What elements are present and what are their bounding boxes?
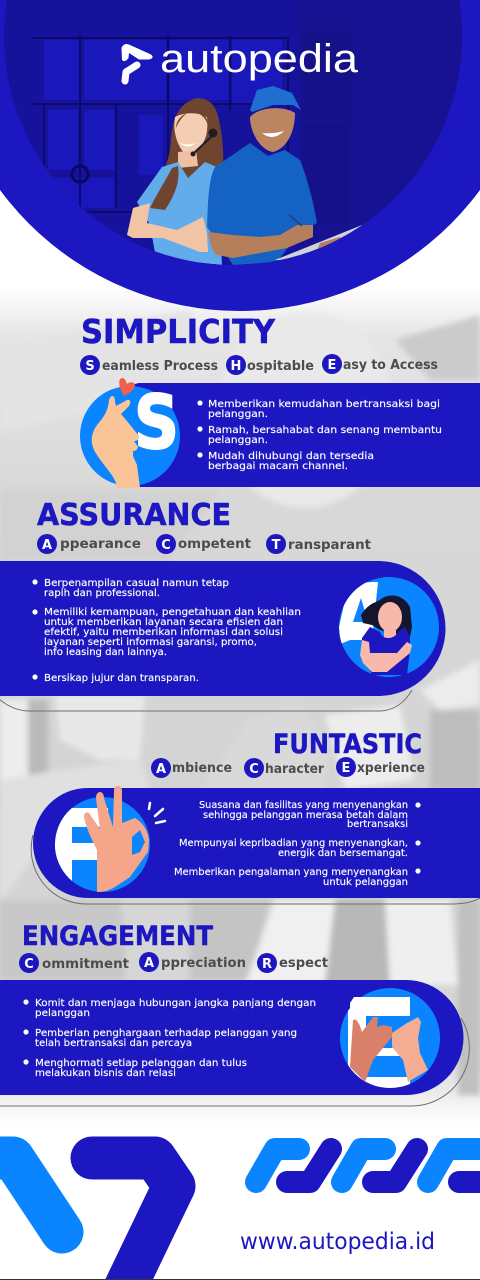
keywords row: ompetent [178, 536, 252, 552]
keywords row: haracter [265, 761, 324, 777]
heading: ENGAGEMENT [22, 921, 214, 952]
keywords row: A [42, 538, 52, 553]
bullet list: pelanggan. [208, 409, 268, 420]
logo icon [122, 44, 153, 81]
bullet list: energik dan bersemangat. [278, 848, 408, 859]
bullet list: Berpenampilan casual namun tetap [44, 578, 229, 589]
bullet list: pelanggan. [208, 435, 268, 446]
bullet list: Ramah, bersahabat dan senang membantu [208, 425, 442, 436]
keywords row [80, 354, 438, 375]
keywords row: A [156, 762, 166, 777]
bullet list: Mudah dihubungi dan tersedia [208, 451, 374, 462]
panel outline [31, 835, 480, 904]
website url: www.autopedia.id [240, 1229, 435, 1255]
illustration: woman agent [127, 98, 223, 265]
keywords row: C [24, 957, 34, 972]
bullet list: Bersikap jujur dan transparan. [44, 673, 199, 684]
keywords row [37, 534, 372, 554]
keywords row: C [161, 538, 171, 553]
bullet list [23, 998, 316, 1079]
heading: SIMPLICITY [81, 312, 276, 351]
bullet list: sehingga pelanggan merasa betah dalam [203, 810, 408, 821]
bullet list: Memberikan kemudahan bertransaksi bagi [208, 399, 440, 410]
bullet list [32, 578, 301, 684]
keywords row: xperience [357, 760, 425, 776]
bullet list: melakukan bisnis dan relasi [35, 1068, 176, 1079]
keywords row: R [262, 957, 272, 972]
logo wordmark: autopedia [160, 37, 359, 81]
keywords row: C [249, 762, 259, 777]
panel [33, 788, 480, 898]
section: funtastic [31, 729, 480, 904]
panel [0, 980, 463, 1095]
keywords row: ransparant [288, 537, 372, 553]
header: blue circle [0, 0, 480, 311]
logo: autopedia [122, 37, 359, 81]
illustration: man with clipboard [207, 86, 367, 265]
keywords row: ppearance [60, 536, 141, 552]
icon: ok hand [50, 786, 165, 896]
keywords row: S [85, 359, 95, 374]
bullet list: Suasana dan fasilitas yang menyenangkan [199, 800, 408, 811]
keywords row: H [231, 359, 241, 374]
bullet list: Komit dan menjaga hubungan jangka panjang dengan [35, 998, 316, 1009]
bullet list: Memberikan pengalaman yang menyenangkan [174, 867, 408, 878]
keywords row: eamless Process [102, 358, 218, 374]
heading: FUNTASTIC [273, 729, 422, 760]
pattern of logo strokes [256, 1149, 480, 1182]
icon: pinky promise [340, 988, 440, 1091]
keywords row: A [144, 956, 154, 971]
section: simplicity [80, 312, 480, 488]
bullet list: bertransaksi [347, 819, 408, 830]
keywords row: E [328, 358, 336, 373]
bullet list: telah bertransaksi dan percaya [35, 1038, 192, 1049]
heading: ASSURANCE [37, 498, 231, 533]
bullet list: rapih dan professional. [44, 588, 160, 599]
footer [0, 1149, 480, 1280]
keywords row: asy to Access [343, 357, 438, 373]
bullet list: Pemberian penghargaan terhadap pelanggan yang [35, 1028, 297, 1039]
bullet list: Memiliki kemampuan, pengetahuan dan keahlian [44, 607, 301, 618]
bullet list: Menghormati setiap pelanggan dan tulus [35, 1058, 247, 1069]
keywords row: ppreciation [161, 955, 246, 971]
section: engagement [0, 921, 469, 1106]
bullet list [174, 800, 421, 888]
bullet list: berbagai macam channel. [208, 461, 348, 472]
bullet list: pelanggan [35, 1008, 90, 1019]
bullet list [197, 399, 442, 472]
keywords row: mbience [172, 760, 232, 776]
bullet list: untuk memberikan layanan secara efisien dan [44, 617, 283, 628]
header: dark building backdrop [0, 0, 475, 275]
bullet list: Mempunyai kepribadian yang menyenangkan, [179, 838, 408, 849]
keywords row [19, 952, 329, 973]
bullet list: layanan seperti informasi garansi, promo, [44, 637, 257, 648]
bullet list: info leasing dan lainnya. [44, 647, 167, 658]
section: assurance [0, 498, 446, 711]
panel outline [0, 690, 412, 711]
panel [0, 561, 446, 696]
keywords row: espect [279, 955, 329, 971]
keywords row [151, 757, 425, 778]
keywords row: T [272, 538, 281, 553]
keywords row: ospitable [247, 358, 314, 374]
bullet list: untuk pelanggan [323, 877, 408, 888]
keywords row: E [342, 761, 350, 776]
keywords row: ommitment [42, 956, 130, 972]
panel outline [0, 1018, 469, 1106]
icon: finger heart: S [134, 380, 179, 466]
background: grayscale office photo [0, 285, 480, 1135]
icon: woman hugging [338, 577, 439, 677]
large logo mark [0, 1158, 174, 1280]
bullet list: efektif, yaitu memberikan informasi dan solusi [44, 627, 283, 638]
icon: finger heart [80, 378, 180, 488]
panel [118, 383, 480, 487]
